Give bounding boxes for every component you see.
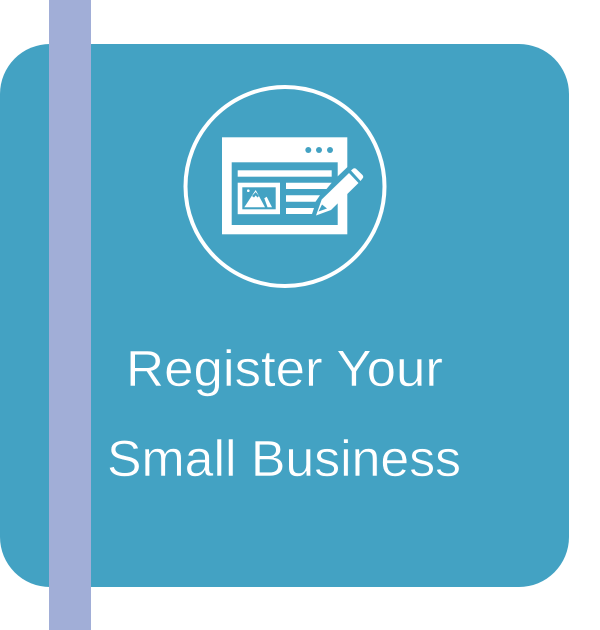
icon: circled web page with pencil — [186, 87, 384, 286]
icon: picture thumbnail — [238, 183, 280, 214]
heading — [107, 340, 461, 487]
heading line 2: Small Business — [107, 430, 461, 487]
heading line 1: Register Your — [126, 340, 443, 397]
vertical lavender band — [49, 0, 91, 630]
icon: pencil — [316, 168, 363, 216]
icon ring — [186, 87, 384, 286]
icon: browser window — [222, 137, 348, 234]
